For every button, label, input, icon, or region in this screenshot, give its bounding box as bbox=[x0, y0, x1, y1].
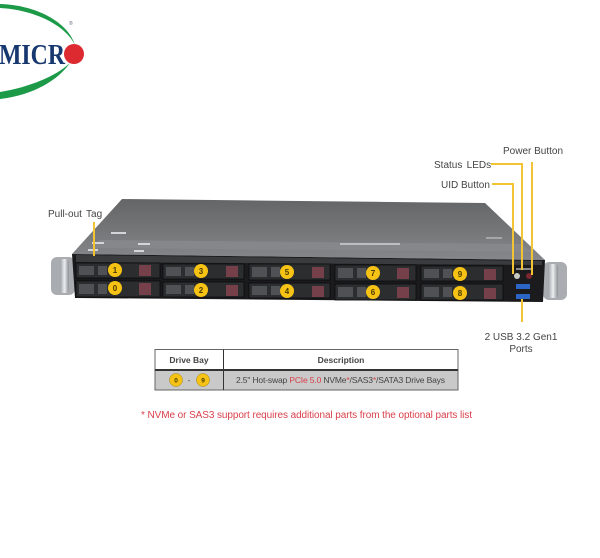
bay 5 bbox=[280, 265, 294, 279]
control panel bbox=[514, 268, 532, 299]
label: pull-out tag: Pull-out Tag bbox=[48, 209, 102, 220]
bay 8 bbox=[453, 286, 467, 300]
table header: drive bay: Drive Bay bbox=[169, 355, 209, 365]
table marker: bay 9: 9 bbox=[201, 378, 205, 384]
drive latches bbox=[79, 266, 452, 297]
table dash: - bbox=[188, 376, 191, 385]
bay 9 bbox=[453, 267, 467, 281]
logo red dot bbox=[64, 44, 84, 64]
left handle bbox=[51, 257, 75, 295]
chassis top cover bbox=[72, 199, 545, 260]
right handle bbox=[543, 262, 567, 300]
label: USB ports: 2 USB 3.2 Gen1 bbox=[485, 332, 558, 343]
arrow: status LEDs bbox=[491, 164, 522, 270]
cover highlights bbox=[88, 232, 502, 252]
table marker: bay 0 bbox=[170, 374, 182, 386]
label: USB ports: Ports bbox=[509, 344, 533, 355]
arrow: pull-out tag bbox=[93, 222, 95, 256]
chassis front panel bbox=[72, 254, 545, 302]
bays bbox=[76, 263, 503, 300]
logo wordmark: MICR bbox=[0, 39, 66, 71]
logo green swoosh bbox=[0, 4, 75, 99]
bay 0 bbox=[108, 281, 122, 295]
bay 1 bbox=[108, 263, 122, 277]
bay 6 bbox=[366, 285, 380, 299]
table frame bbox=[155, 350, 458, 390]
vent row bbox=[76, 255, 542, 265]
footnote: * NVMe or SAS3 support requires additional parts from the optional parts list bbox=[141, 410, 472, 421]
bay 7 bbox=[366, 266, 380, 280]
logo bbox=[0, 4, 84, 99]
bay 5: 5 bbox=[285, 268, 290, 277]
bay 4 bbox=[280, 284, 294, 298]
table marker: bay 0: 0 bbox=[174, 378, 178, 384]
table header: description: Description bbox=[318, 355, 364, 365]
bay 6: 6 bbox=[371, 288, 376, 297]
bay 2 bbox=[194, 283, 208, 297]
drive bay number markers bbox=[108, 263, 467, 300]
chassis lighter front strip bbox=[92, 240, 533, 252]
table description text: 2.5" Hot-swap PCIe 5.0 NVMe*/SAS3*/SATA3 Drive Bays bbox=[236, 375, 445, 385]
logo registered mark: ® bbox=[69, 20, 73, 27]
arrow: UID button bbox=[492, 184, 513, 274]
arrow: USB ports bbox=[521, 299, 523, 322]
bay 8: 8 bbox=[458, 289, 463, 298]
arrow: power button bbox=[531, 162, 533, 275]
bay 7: 7 bbox=[371, 269, 376, 278]
label: status LEDs: Status LEDs bbox=[434, 160, 491, 171]
server illustration bbox=[51, 199, 567, 302]
bay 3: 3 bbox=[199, 267, 204, 276]
bay 3 bbox=[194, 264, 208, 278]
drive release tabs bbox=[139, 265, 496, 299]
bay 2: 2 bbox=[199, 286, 204, 295]
bay 0: 0 bbox=[113, 284, 118, 293]
bay 1: 1 bbox=[113, 266, 118, 275]
drive bay table bbox=[155, 350, 458, 390]
label: UID button: UID Button bbox=[441, 180, 490, 191]
table marker: bay 9 bbox=[196, 374, 210, 386]
bay 9: 9 bbox=[458, 270, 463, 279]
bay 4: 4 bbox=[285, 287, 290, 296]
label: power button: Power Button bbox=[503, 146, 563, 157]
